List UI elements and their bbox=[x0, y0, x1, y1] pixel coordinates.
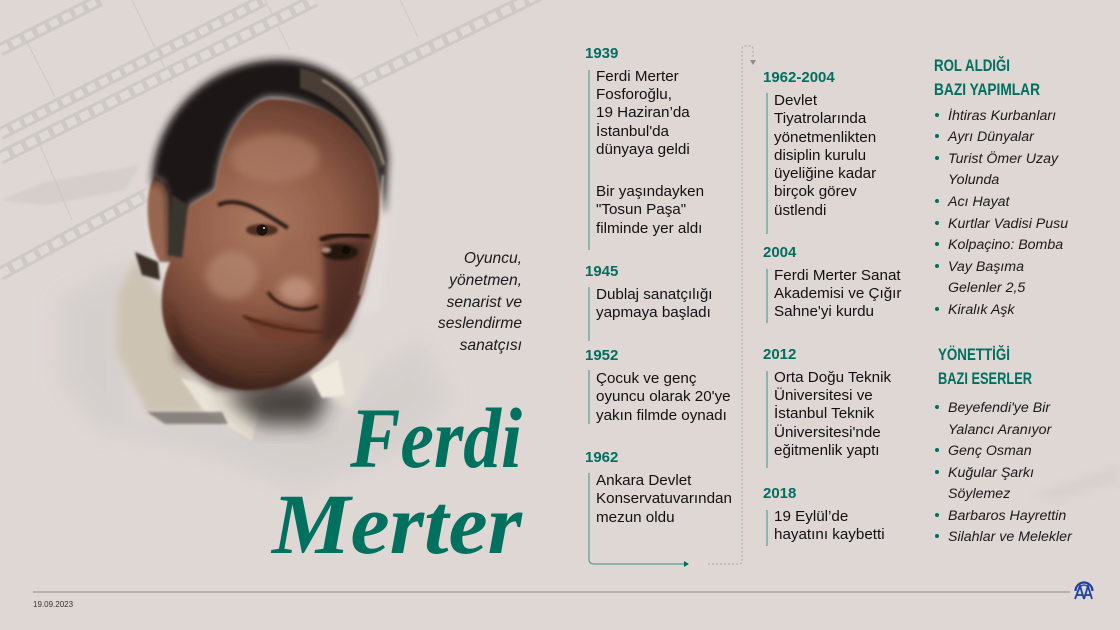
dark side of face bbox=[320, 240, 368, 345]
timeline column 2 bbox=[763, 69, 901, 546]
sideburn bbox=[168, 195, 188, 258]
1945: 1945 bbox=[585, 263, 618, 280]
2012: Üniversitesi ve bbox=[774, 386, 873, 404]
1962 bbox=[585, 449, 732, 526]
soft halo behind head bbox=[145, 54, 394, 330]
list: films acted in: İhtiras Kurbanları bbox=[948, 107, 1056, 124]
list: films acted in: Kolpaçino: Bomba bbox=[948, 237, 1063, 253]
1945: Dublaj sanatçılığı bbox=[596, 286, 713, 303]
list: films acted in: BAZI YAPIMLAR bbox=[934, 81, 1040, 99]
2018: hayatını kaybetti bbox=[774, 526, 885, 543]
icon: AA logo bbox=[1075, 582, 1092, 599]
1945 bbox=[585, 263, 713, 321]
list: films acted in bbox=[934, 56, 1068, 318]
nose bbox=[268, 235, 320, 310]
descriptor text: sanatçısı bbox=[460, 337, 522, 354]
1939: Ferdi Merter bbox=[596, 68, 679, 85]
footer bbox=[33, 582, 1092, 609]
eyebrows bbox=[218, 202, 288, 228]
list: films acted in: ROL ALDIĞI bbox=[934, 56, 1010, 75]
list: directed works: Genç Osman bbox=[948, 443, 1032, 459]
list: films acted in: Kurtlar Vadisi Pusu bbox=[948, 216, 1068, 232]
forehead highlight bbox=[231, 134, 319, 182]
1939: filminde yer aldı bbox=[596, 220, 702, 237]
film strip background bbox=[0, 0, 548, 274]
2012: İstanbul Teknik bbox=[774, 404, 875, 422]
2018: 19 Eylül’de bbox=[774, 508, 848, 525]
2018 bbox=[763, 485, 885, 543]
2012: Orta Doğu Teknik bbox=[774, 369, 891, 386]
1962-2004: Tiyatrolarında bbox=[774, 110, 867, 127]
1962: mezun oldu bbox=[596, 509, 675, 526]
1962-2004: disiplin kurulu bbox=[774, 147, 866, 164]
1952: yakın filmde oynadı bbox=[596, 407, 727, 424]
list: films acted in: Vay Başıma bbox=[948, 259, 1024, 275]
list: films acted in: Acı Hayat bbox=[947, 194, 1011, 210]
watercolor smudges bbox=[0, 165, 1120, 500]
timeline arrow bbox=[589, 70, 689, 567]
1962-2004 bbox=[763, 69, 876, 219]
2012 bbox=[763, 346, 891, 459]
1939: 19 Haziran’da bbox=[596, 104, 690, 121]
jaw shading bbox=[170, 300, 310, 392]
2012: eğitmenlik yaptı bbox=[774, 442, 880, 459]
2004: Ferdi Merter Sanat bbox=[774, 267, 901, 284]
1952: 1952 bbox=[585, 347, 618, 364]
list: films acted in: Kiralık Aşk bbox=[948, 302, 1015, 318]
2012: 2012 bbox=[763, 346, 796, 363]
descriptor text bbox=[438, 250, 522, 354]
mouth bbox=[243, 316, 322, 342]
1962-2004: üyeliğine kadar bbox=[774, 165, 876, 182]
list: directed works: Beyefendi'ye Bir bbox=[948, 400, 1051, 416]
1962: Ankara Devlet bbox=[596, 472, 692, 489]
face bbox=[162, 99, 380, 390]
1939: Bir yaşındayken bbox=[596, 183, 704, 200]
title: Ferdi Merter: Ferdi bbox=[349, 390, 522, 486]
1962: 1962 bbox=[585, 449, 618, 466]
1939: dünyaya geldi bbox=[596, 141, 690, 158]
title: Ferdi Merter: Merter bbox=[270, 476, 524, 572]
descriptor text: yönetmen, bbox=[448, 272, 522, 289]
right eye bbox=[321, 244, 358, 260]
descriptor text: senarist ve bbox=[447, 294, 522, 311]
list: directed works: Silahlar ve Melekler bbox=[948, 529, 1073, 545]
list: directed works: BAZI ESERLER bbox=[938, 370, 1032, 388]
ear bbox=[148, 176, 180, 262]
list: films acted in: Gelenler 2,5 bbox=[948, 280, 1025, 296]
1962-2004: üstlendi bbox=[774, 202, 826, 219]
list: directed works bbox=[935, 345, 1073, 545]
1962-2004: yönetmenlikten bbox=[774, 129, 876, 146]
1962-2004: birçok görev bbox=[774, 183, 857, 200]
1962: Konservatuvarından bbox=[596, 490, 732, 507]
1939 bbox=[585, 45, 704, 237]
1939: Fosforoğlu, bbox=[596, 86, 672, 103]
1962-2004: 1962-2004 bbox=[763, 69, 835, 86]
descriptor text: seslendirme bbox=[438, 315, 522, 332]
1952: oyuncu olarak 20'ye bbox=[596, 388, 731, 405]
1952: Çocuk ve genç bbox=[596, 370, 697, 387]
1939: 1939 bbox=[585, 45, 618, 62]
left eye bbox=[246, 224, 278, 236]
list: films acted in: Ayrı Dünyalar bbox=[947, 129, 1035, 145]
list: directed works: Söylemez bbox=[948, 486, 1010, 502]
list: directed works: Barbaros Hayrettin bbox=[948, 508, 1066, 524]
title: Ferdi Merter bbox=[270, 390, 524, 572]
dotted connector arrow bbox=[708, 46, 756, 564]
2018: 2018 bbox=[763, 485, 796, 502]
list: films acted in: Yolunda bbox=[948, 172, 999, 188]
1939: İstanbul'da bbox=[596, 122, 670, 140]
2004 bbox=[763, 244, 901, 320]
2004: 2004 bbox=[763, 244, 797, 261]
list: directed works: Kuğular Şarkı bbox=[948, 465, 1034, 481]
cheek highlight bbox=[206, 251, 258, 299]
1952 bbox=[585, 347, 731, 424]
1939: "Tosun Paşa" bbox=[596, 201, 686, 218]
2004: Akademisi ve Çığır bbox=[774, 285, 901, 302]
list: directed works: YÖNETTİĞİ bbox=[938, 345, 1010, 364]
1962-2004: Devlet bbox=[774, 92, 818, 109]
list: directed works: Yalancı Aranıyor bbox=[948, 422, 1053, 438]
shirt bbox=[116, 252, 372, 440]
timeline column 1 bbox=[585, 45, 732, 567]
list: films acted in: Turist Ömer Uzay bbox=[948, 149, 1059, 167]
hair bbox=[152, 60, 388, 258]
right edge highlight bbox=[360, 175, 383, 295]
portrait of Ferdi Merter bbox=[116, 54, 394, 440]
1945: yapmaya başladı bbox=[596, 304, 711, 321]
footer: 19.09.2023 bbox=[33, 600, 74, 609]
2012: Üniversitesi'nde bbox=[774, 423, 881, 441]
descriptor text: Oyuncu, bbox=[464, 250, 522, 267]
2004: Sahne'yi kurdu bbox=[774, 303, 874, 320]
